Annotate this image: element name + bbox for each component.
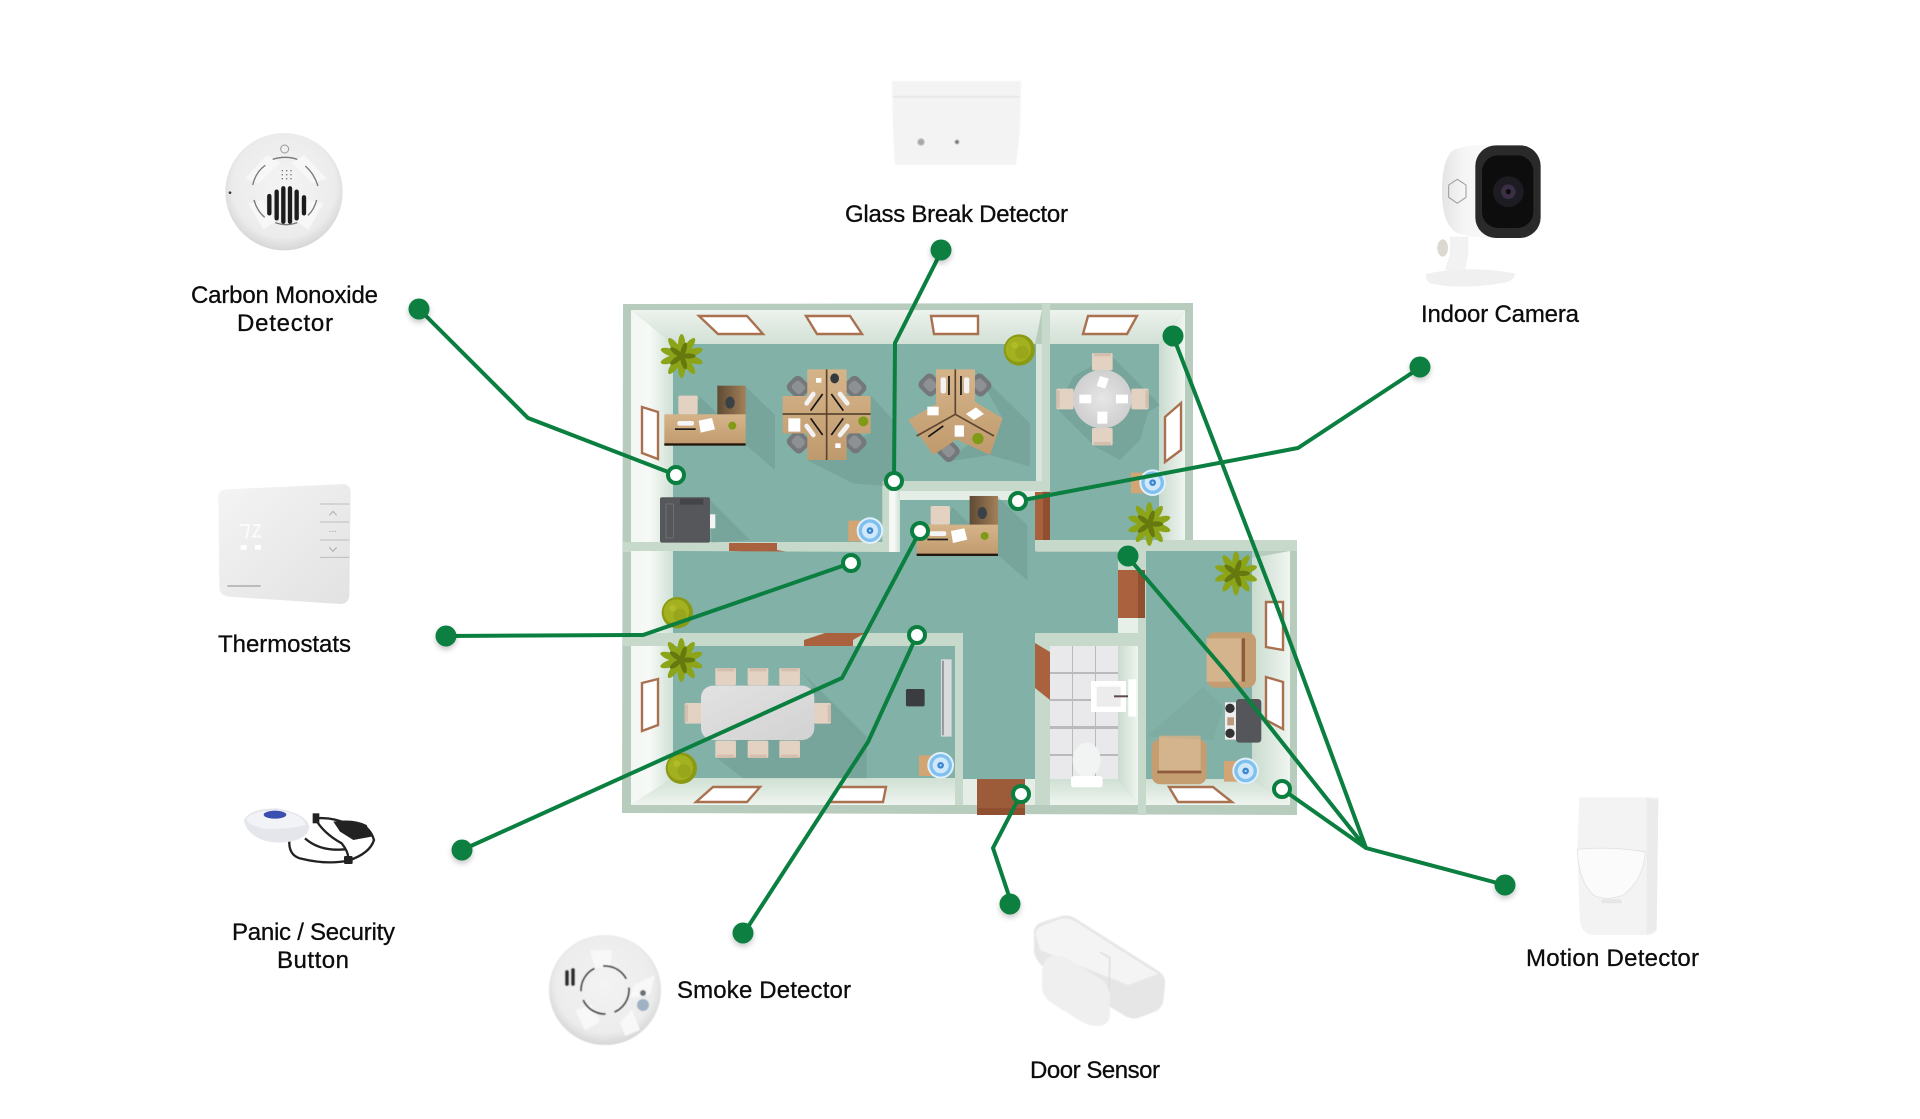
building walls [622,303,1297,815]
line: carbon monoxide [419,309,676,475]
plant: conference bottom [666,753,697,784]
device: thermostat [218,484,351,604]
side table [1147,687,1261,743]
conference table [685,668,867,778]
sink [1091,679,1136,717]
three-person workstation [908,369,1030,467]
device: panic button [244,808,374,864]
water cooler: break room [1131,469,1166,496]
plant: conference top [659,638,703,682]
label: carbon monoxide: Carbon Monoxide [191,282,378,309]
line: smoke detector [744,635,917,933]
floor plan [622,303,1297,815]
screen [941,659,952,737]
dot: door sensor [1000,894,1020,914]
room: conference [623,633,963,805]
lines: motion detector [1127,336,1505,885]
line: thermostat [446,563,851,636]
door: right room [1118,570,1145,618]
label: smoke detector: Smoke Detector [677,977,851,1004]
line: indoor camera [1018,367,1421,501]
device: carbon monoxide detector [225,133,343,250]
room: bathroom [1035,633,1146,805]
dot: carbon monoxide [408,298,430,320]
door: entrance [977,779,1025,815]
marker: motion top right [1162,326,1184,346]
windows [642,316,1283,802]
room: break room [1042,304,1185,543]
marker: smoke detector [909,627,925,643]
label: door sensor: Door Sensor [1030,1057,1160,1084]
door: office [729,543,800,554]
room: open office [623,310,1050,554]
water cooler: conference [919,752,954,779]
furniture: break room [1056,353,1171,546]
connector end dots [408,240,1516,944]
device: glass break detector [892,81,1021,165]
armchair: upper [1207,632,1256,688]
printer [660,497,750,543]
corridor and reception floor [631,492,1297,815]
device: indoor camera [1426,145,1541,287]
desk: office [664,386,775,470]
label: glass break: Glass Break Detector [845,201,1068,228]
plant: break room [1127,502,1171,546]
room: lounge [1146,551,1290,805]
dot: thermostat [436,626,456,646]
four-person workstation [783,369,893,487]
plant: corridor [662,597,693,628]
marker: panic button [912,523,928,539]
door: bathroom [1035,643,1050,700]
line: door sensor [993,794,1021,905]
label: detector: Detector [237,310,333,337]
dot: smoke detector [732,922,754,944]
door: reception side [1035,492,1050,540]
furniture: conference room [659,597,954,784]
plant: lounge [1214,551,1258,595]
marker: motion doorway [1118,546,1138,566]
water cooler: office [848,517,883,544]
label: thermostats: Thermostats [218,631,351,658]
label: panic security: Panic / Security [232,919,395,946]
toilet [1071,743,1103,787]
label: motion detector: Motion Detector [1526,945,1699,972]
marker: thermostat [843,555,859,571]
furniture: bathroom and lounge [1071,551,1261,787]
marker: glass break [886,473,902,489]
dot: indoor camera [1410,356,1430,378]
connector lines [419,250,1505,933]
plant: office corner [660,334,704,378]
furniture: top rooms [660,334,1035,580]
marker: motion lounge corner [1274,781,1290,797]
desk: reception [917,496,1027,580]
marker: door sensor [1013,786,1029,802]
marker: carbon monoxide [668,467,684,483]
marker: indoor camera [1010,493,1026,509]
line: glass break [894,250,942,481]
label: indoor camera: Indoor Camera [1421,301,1580,328]
projector [906,689,925,706]
device: door sensor [1034,916,1165,1026]
dot: panic button [452,840,472,860]
round table [1056,353,1160,460]
armchair: lower [1152,736,1207,784]
plant: office right [1004,334,1035,366]
label: button: Button [277,947,349,974]
device: motion detector [1577,797,1658,935]
device: smoke detector [549,935,661,1045]
dot: glass break [930,240,952,260]
dot: motion detector [1494,874,1516,896]
water cooler: lounge [1224,758,1259,784]
door: conference [804,633,865,646]
line: panic button [462,531,920,850]
